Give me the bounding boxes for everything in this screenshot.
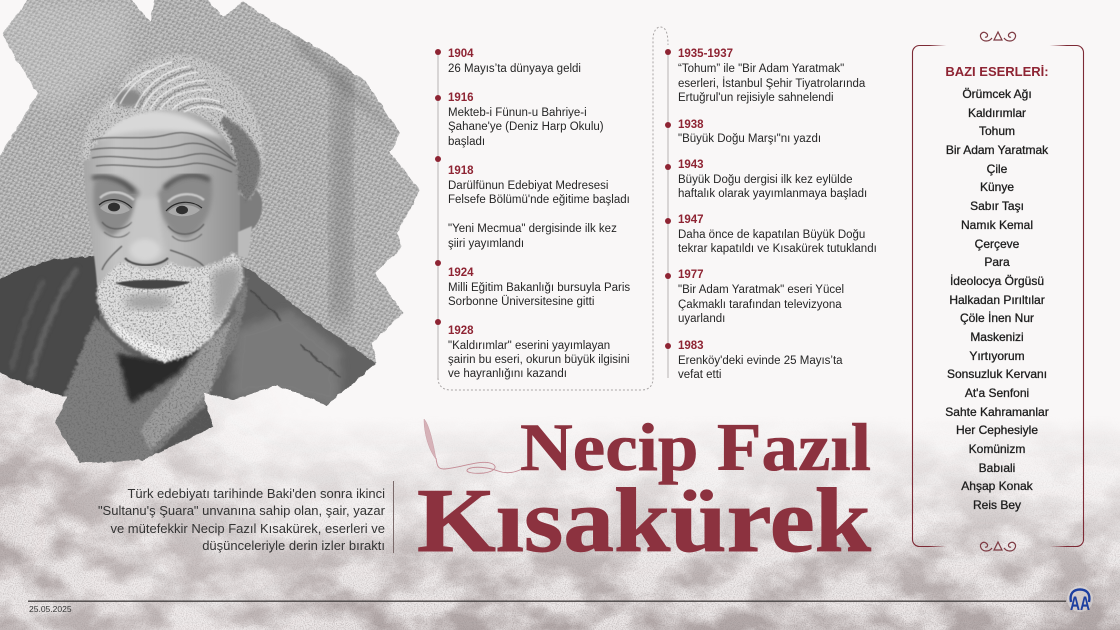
entry 1935-1937: Ertuğrul'un rejisiyle sahnelendi <box>678 92 834 104</box>
entry 1935-1937: 1935-1937 <box>678 48 733 60</box>
list of works: Künye <box>980 180 1014 194</box>
list of works: Bir Adam Yaratmak <box>946 143 1049 157</box>
timeline: right column <box>665 48 877 381</box>
intro text: düşünceleriyle derin izler bıraktı <box>202 538 385 553</box>
ear <box>240 189 262 238</box>
list of works: Namık Kemal <box>961 218 1033 232</box>
entry 1943 <box>665 159 867 200</box>
entry 1947: 1947 <box>678 214 704 226</box>
panel: works list <box>912 32 1084 551</box>
entry 1983: 1983 <box>678 340 704 352</box>
heading: BAZI ESERLERİ: <box>945 64 1049 79</box>
list of works: Para <box>984 255 1010 269</box>
list of works: Çöle İnen Nur <box>960 311 1034 325</box>
entry 1947: Daha önce de kapatılan Büyük Doğu <box>678 229 865 241</box>
entry 1924: Sorbonne Üniversitesine gitti <box>448 296 594 308</box>
list of works: Her Cephesiyle <box>956 423 1038 437</box>
entry 1904: 26 Mayıs’ta dünyaya geldi <box>448 63 581 75</box>
list of works: Sonsuzluk Kervanı <box>947 367 1047 381</box>
list of works: At'a Senfoni <box>965 386 1029 400</box>
paper background texture <box>0 372 1120 630</box>
list of works: Komünizm <box>969 442 1025 456</box>
eyes and brows <box>92 175 212 241</box>
entry 1928: 1928 <box>448 325 474 337</box>
entry 1943: 1943 <box>678 159 704 171</box>
intro text <box>98 481 394 553</box>
nose <box>102 198 205 270</box>
list of works: Çile <box>987 162 1008 176</box>
entry 1918: 1918 <box>448 165 474 177</box>
entry 1918 <box>435 156 630 250</box>
hair <box>82 55 263 202</box>
head <box>84 103 244 314</box>
beard and moustache <box>97 252 243 362</box>
list of works: Sahte Kahramanlar <box>945 405 1049 419</box>
list of works: Ahşap Konak <box>961 479 1034 493</box>
timeline: left column <box>435 48 630 380</box>
entry 1983: Erenköy'deki evinde 25 Mayıs’ta <box>678 355 843 367</box>
entry 1924: Milli Eğitim Bakanlığı bursuyla Paris <box>448 282 630 294</box>
entry 1924 <box>435 260 630 308</box>
date: 25.05.2025 <box>29 604 72 614</box>
entry 1916: 1916 <box>448 92 474 104</box>
list of works: Reis Bey <box>973 498 1021 512</box>
entry 1928: şairin bu eseri, okurun büyük ilgisini <box>448 354 630 366</box>
list of works: Tohum <box>979 124 1015 138</box>
entry 1928: "Kaldırımlar" eserini yayımlayan <box>448 340 610 352</box>
entry 1977: 1977 <box>678 269 704 281</box>
entry 1918: şiiri yayımlandı <box>448 238 524 250</box>
entry 1977: "Bir Adam Yaratmak" eseri Yücel <box>678 284 844 296</box>
title <box>417 409 871 571</box>
entry 1918: "Yeni Mecmua" dergisinde ilk kez <box>448 223 617 235</box>
entry 1918: Felsefe Bölümü'nde eğitime başladı <box>448 194 630 206</box>
list of works: Maskenizi <box>970 330 1024 344</box>
entry 1904 <box>435 48 581 75</box>
list of works: Örümcek Ağı <box>962 87 1032 101</box>
entry 1938: 1938 <box>678 119 704 131</box>
title: Kısakürek <box>417 470 871 571</box>
list of works: Babıali <box>979 461 1015 475</box>
sweater <box>0 256 380 420</box>
list of works: Çerçeve <box>975 237 1020 251</box>
entry 1924: 1924 <box>448 267 474 279</box>
entry 1977: Çakmaklı tarafından televizyona <box>678 299 842 311</box>
footer line <box>28 600 1066 602</box>
ornament: bottom scroll <box>980 542 1016 551</box>
entry 1916: Mekteb-i Fünun-u Bahriye-i <box>448 107 587 119</box>
entry 1904: 1904 <box>448 48 474 60</box>
entry 1916: Şahane'ye (Deniz Harp Okulu) <box>448 121 604 133</box>
entry 1947: tekrar kapatıldı ve Kısakürek tutuklandı <box>678 243 877 255</box>
entry 1935-1937: eserleri, İstanbul Şehir Tiyatrolarında <box>678 77 866 90</box>
intro text: ve mütefekkir Necip Fazıl Kısakürek, eserleri ve <box>110 521 385 536</box>
list of works: Sabır Taşı <box>970 199 1024 213</box>
list of works <box>945 87 1049 512</box>
entry 1983: vefat etti <box>678 369 721 381</box>
entry 1947 <box>665 214 877 255</box>
entry 1916 <box>435 92 604 148</box>
forehead wrinkles <box>90 133 236 172</box>
entry 1935-1937 <box>665 48 866 104</box>
entry 1943: haftalık olarak yayımlanmaya başladı <box>678 188 867 200</box>
intro text: Türk edebiyatı tarihinde Baki'den sonra ikinci <box>127 486 385 501</box>
entry 1938: "Büyük Doğu Marşı"nı yazdı <box>678 133 821 145</box>
title: Necip Fazıl <box>520 409 871 485</box>
timeline connector <box>438 27 668 390</box>
intro text: "Sultanu'ş Şuara" unvanına sahip olan, şair, yazar <box>98 503 386 518</box>
entry 1928: ve hayranlığını kazandı <box>448 368 567 380</box>
list of works: İdeolocya Örgüsü <box>950 274 1044 288</box>
entry 1938 <box>665 119 821 145</box>
entry 1916: başladı <box>448 136 485 148</box>
entry 1935-1937: “Tohum” ile "Bir Adam Yaratmak" <box>678 63 844 75</box>
list of works: Kaldırımlar <box>968 106 1026 120</box>
list of works: Halkadan Pırıltılar <box>949 293 1045 307</box>
entry 1943: Büyük Doğu dergisi ilk kez eylülde <box>678 174 853 186</box>
knit scarf <box>52 272 248 465</box>
entry 1977: uyarlandı <box>678 313 725 325</box>
portrait of Necip Fazıl Kısakürek on brushed canvas <box>0 0 430 470</box>
list of works: Yırtıyorum <box>969 349 1025 363</box>
entry 1977 <box>665 269 844 325</box>
ornament: top scroll <box>980 32 1016 41</box>
entry 1918: Darülfünun Edebiyat Medresesi <box>448 180 608 192</box>
feather quill flourish <box>424 419 522 473</box>
entry 1928 <box>435 319 630 380</box>
logo: AA <box>1067 586 1093 615</box>
entry 1983 <box>665 340 843 381</box>
logo: AA: AA <box>1070 594 1090 615</box>
